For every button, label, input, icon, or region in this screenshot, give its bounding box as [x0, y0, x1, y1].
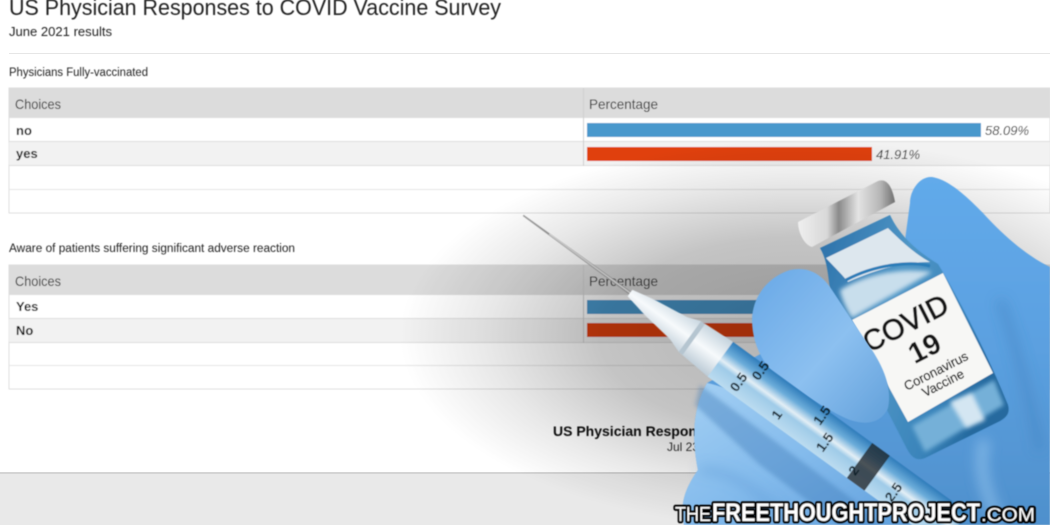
syringe white hub [617, 276, 733, 377]
syringe scale numbers: 2 [845, 462, 862, 478]
syringe scale numbers: 2.5 [881, 479, 906, 505]
syringe scale numbers: 1.5 [810, 403, 834, 428]
vial meniscus [846, 264, 930, 280]
watermark logo: .COM [981, 505, 1035, 525]
syringe scale numbers: 1.5 [812, 429, 837, 455]
table rows: Choices [15, 273, 61, 289]
vial paper label: COVID [858, 289, 954, 359]
syringe rubber stopper [847, 443, 890, 491]
vial white rod [950, 393, 985, 428]
syringe shadow on glove [695, 385, 880, 525]
vial glass body [820, 215, 1009, 459]
table rows [9, 88, 1050, 213]
table rows: Percentage [589, 96, 658, 112]
vial lower liquid [912, 380, 1004, 452]
table heading: Physicians Fully-vaccinated [9, 67, 148, 79]
bar chart: yes [587, 300, 887, 314]
icon: gloved hand behind vial [683, 177, 1050, 525]
footer caption [553, 423, 733, 454]
table rows [9, 265, 1050, 389]
vial paper label: Coronavirus [901, 348, 971, 394]
page heading [9, 0, 501, 39]
syringe scale numbers: 1 [768, 406, 785, 422]
icon: COVID-19 vaccine vial [798, 180, 1009, 459]
syringe scale numbers: 0.5 [726, 369, 751, 395]
bar chart: no [587, 323, 887, 337]
footer caption: Jul 23, 2021 [667, 440, 733, 454]
table rows: yes [16, 146, 38, 161]
icon: syringe [510, 196, 969, 525]
vial froth [840, 271, 932, 318]
table rows: Yes [16, 299, 38, 314]
bar chart: no 58.09% [587, 123, 1029, 138]
footer caption: US Physician Responses [553, 423, 721, 439]
syringe scale numbers: 0.5 [748, 358, 773, 383]
panel: adverse reaction table [9, 243, 1050, 389]
glove palm [683, 383, 915, 525]
icon: gloved index finger [752, 269, 889, 423]
table rows: Percentage [589, 273, 658, 289]
glove creases [700, 300, 1040, 525]
bar chart: no 58.09%: 58.09% [985, 123, 1029, 138]
vial metal cap [798, 180, 895, 247]
vial paper label: Vaccine [919, 366, 967, 400]
panel: physicians fully-vaccinated table [9, 67, 1050, 213]
vial paper label: 19 [903, 327, 947, 371]
page heading: June 2021 results [9, 24, 112, 39]
table heading: Aware of patients suffering significant adverse reaction [9, 243, 295, 255]
syringe blue barrel [708, 342, 968, 525]
vial paper label [852, 273, 993, 422]
syringe needle [522, 214, 633, 296]
table rows: Choices [15, 96, 61, 112]
bar chart: yes 41.91% [587, 147, 920, 162]
syringe scale numbers [726, 351, 917, 506]
table rows: no [16, 123, 32, 138]
vial upper glass highlight [826, 228, 930, 282]
table rows: No [16, 323, 33, 338]
bar chart: yes 41.91%: 41.91% [876, 147, 920, 162]
